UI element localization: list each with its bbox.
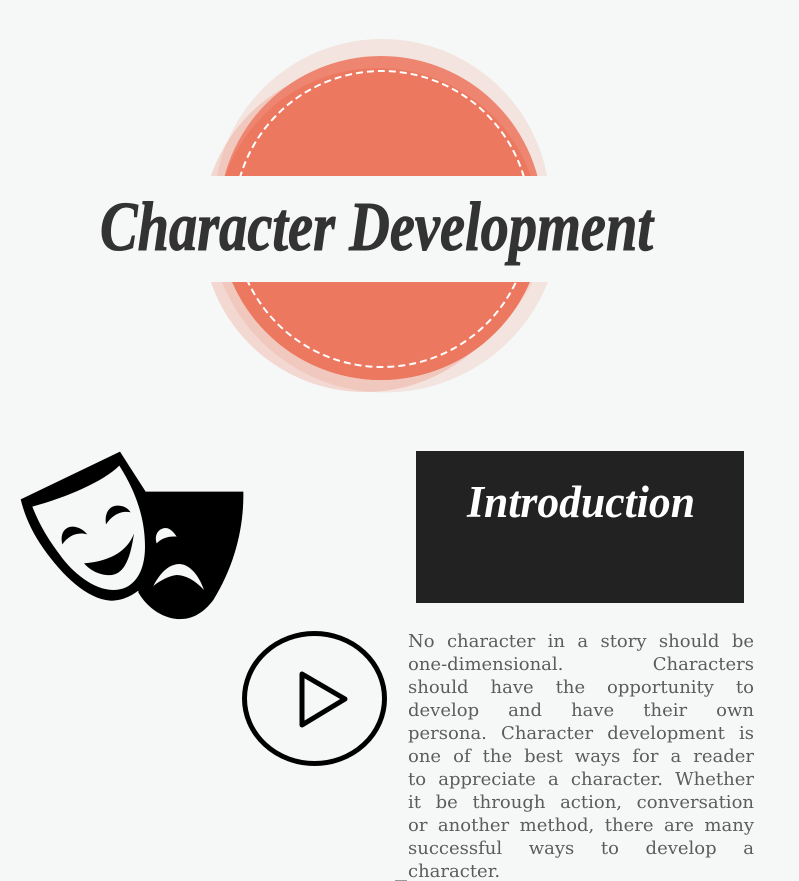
body text: introduction paragraph: one of the best ways for a reader xyxy=(408,746,754,767)
body text: introduction paragraph: develop and have their own xyxy=(408,700,754,721)
title: Character Development xyxy=(100,189,655,266)
body text: introduction paragraph: to appreciate a character. Whether xyxy=(408,769,754,790)
body text: introduction paragraph: one-dimensional. Characters xyxy=(408,654,754,675)
icon: play button xyxy=(244,634,384,764)
small mark at page bottom xyxy=(395,880,407,881)
body text: introduction paragraph: should have the opportunity to xyxy=(408,677,754,698)
body text: introduction paragraph: or another method, there are many xyxy=(408,815,754,836)
body text: introduction paragraph: persona. Character development is xyxy=(408,723,754,744)
body text: introduction paragraph: successful ways to develop a xyxy=(408,838,754,859)
body text: introduction paragraph xyxy=(408,631,754,881)
title band xyxy=(0,176,799,282)
icon: theatre masks xyxy=(21,452,243,619)
body text: introduction paragraph: it be through action, conversation xyxy=(408,792,754,813)
heading: Introduction: Introduction xyxy=(466,477,695,527)
body text: introduction paragraph: No character in a story should be xyxy=(408,631,754,652)
panel: introduction heading box xyxy=(416,451,744,603)
badge: coral circle xyxy=(202,39,560,392)
